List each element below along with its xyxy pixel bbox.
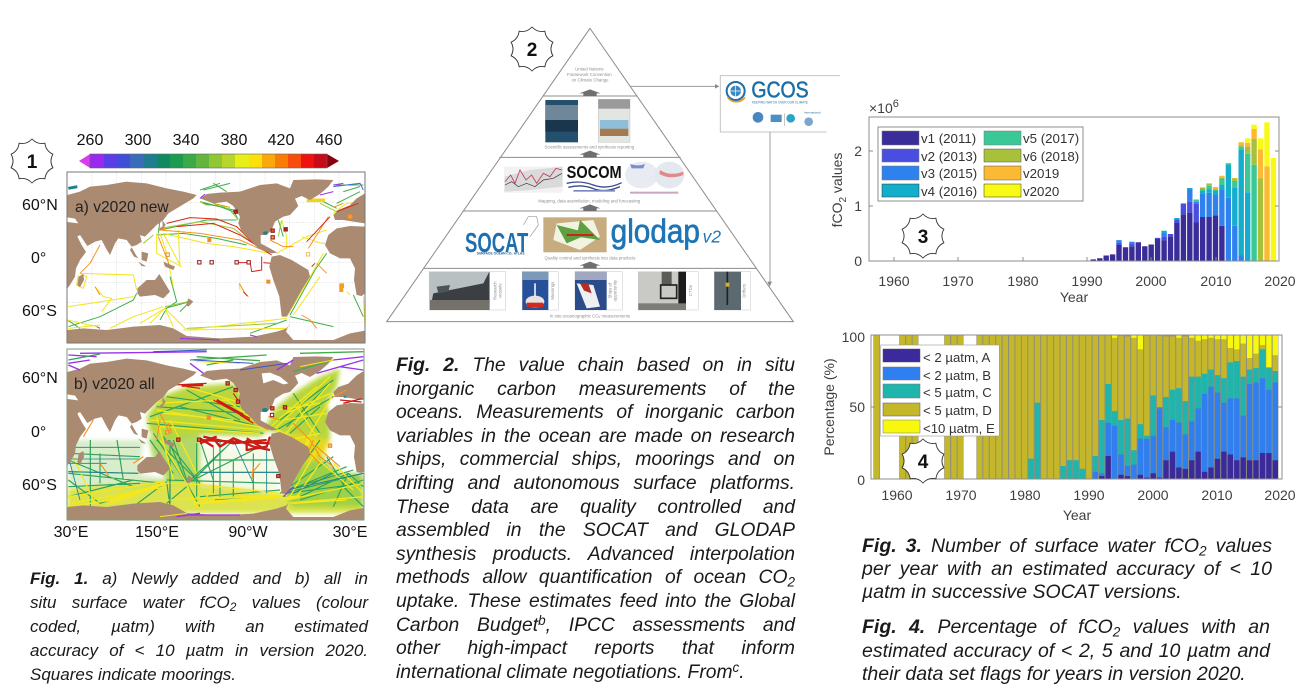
tier: in situ measurements: Ships of (608, 282, 613, 298)
axis labels: 2000 (1135, 273, 1167, 289)
moorings b (166, 382, 347, 478)
panel: value chain pyramid (387, 28, 840, 322)
tier: data products: SOCAT (465, 227, 528, 258)
axis labels: 2000 (1137, 487, 1169, 503)
GCOS box (720, 76, 840, 132)
tier: data products: SURFACE OCEAN CO₂ ATLAS (477, 251, 525, 255)
colour scale: 340 (173, 132, 199, 149)
axis labels: 1970 (945, 487, 977, 503)
caption: Fig. 2: ships, commercial ships, moorings and on (396, 449, 795, 470)
bars by SOCAT version (1093, 122, 1273, 261)
legend: < 2 µatm, A (923, 350, 991, 365)
map b: v2020 all (67, 349, 365, 520)
axis labels: 2020 (1264, 487, 1296, 503)
caption: Fig. 4: Fig. 4. Percentage of fCO2 values with an (862, 616, 1270, 639)
GCOS box: International (804, 110, 821, 114)
legend: <10 µatm, E (923, 421, 995, 436)
axis labels: 1990 (1071, 273, 1103, 289)
chart: fCO2 values per year (829, 98, 1296, 305)
colour scale: 420 (268, 132, 294, 149)
caption: Fig. 2 (396, 355, 796, 683)
caption: Fig. 3: µatm in successive SOCAT versions. (862, 581, 1182, 603)
tier: in situ measurements: vessels (497, 283, 502, 298)
caption: Fig. 1: accuracy of < 10 µatm in version 2020. (30, 641, 368, 660)
axis labels: 1960 (881, 487, 913, 503)
caption: Fig. 2: inorganic carbon measurements of the (396, 379, 795, 400)
tier: in situ measurements: CTDs (688, 285, 693, 296)
axis labels: Percentage (%) (821, 358, 837, 456)
legend: v1 (2011) (921, 131, 976, 146)
caption: Fig. 1: situ surface water fCO2 values (colour (30, 593, 368, 614)
tier: UNFCCC (567, 66, 612, 83)
legend: v2019 (1023, 166, 1059, 181)
colour scale: 260 (77, 132, 103, 149)
axis labels (829, 98, 1296, 305)
legend: v2 (2013) (921, 149, 977, 164)
map b label: b) v2020 all (74, 376, 155, 393)
caption: Fig. 4: estimated accuracy of < 2, 5 and 10 µatm and (862, 640, 1270, 662)
pyramid outline (387, 28, 793, 322)
caption: Fig. 2: These data are quality controlled and (396, 497, 795, 518)
axis labels: 6 (893, 98, 899, 110)
tier: assessments: Scientific assessments and synthesis reporting (544, 145, 635, 150)
axis labels: 50 (849, 399, 865, 415)
axis labels: 1 (854, 198, 862, 214)
axis labels: 2 (838, 197, 849, 203)
tier: assessments (544, 99, 635, 150)
map longitude labels: 30°E (54, 524, 88, 541)
colour scale (77, 132, 342, 168)
axis labels: ×10 (869, 100, 893, 116)
tier: UNFCCC: United Nations (575, 66, 604, 71)
arrow: GCOS to observations (767, 132, 772, 287)
axis labels: fCO (829, 203, 845, 227)
caption: Fig. 4 (862, 616, 1270, 685)
caption: Fig. 3: per year with an estimated accuracy of < 10 (862, 558, 1272, 580)
map longitude labels: 150°E (135, 524, 179, 541)
caption: Fig. 2: variables in the ocean are made on research (396, 426, 795, 447)
caption: Fig. 3 (862, 535, 1272, 603)
colour scale: 460 (316, 132, 342, 149)
map b latitude labels: 60°N (22, 370, 58, 387)
axis labels (821, 329, 1296, 523)
axis labels: Year (1060, 289, 1088, 305)
map longitude labels (54, 524, 367, 541)
tier: mapping and forecasting: Mapping, data assimilation, modeling and forecasting (538, 198, 641, 203)
axis labels: 1980 (1009, 487, 1041, 503)
GCOS box: KEEPING WATCH OVER OUR CLIMATE (752, 101, 809, 105)
arrow: UNFCCC to GCOS (630, 84, 719, 89)
caption: Fig. 2: drifting and autonomous surface platforms. (396, 473, 795, 494)
tier: in situ measurements: opportunity (613, 279, 618, 301)
map a latitude labels (22, 197, 58, 320)
map longitude labels: 90°W (228, 524, 269, 541)
caption: Fig. 2: international climate negotiations. Fromc. (396, 660, 745, 683)
caption: Fig. 2: synthesis products. Advanced interpolation (396, 544, 795, 565)
bar gaps (873, 335, 1278, 479)
legend: v2020 (1023, 184, 1059, 199)
axis labels: 1990 (1073, 487, 1105, 503)
tier: data products: v2 (703, 227, 721, 247)
tier: data products: glodap (611, 214, 700, 251)
badge 3 (902, 214, 944, 258)
tier: data products (465, 214, 721, 261)
axis labels: 100 (842, 329, 865, 345)
map b latitude labels: 60°S (22, 477, 57, 494)
map b latitude labels: 0° (31, 424, 46, 441)
badge 2 (511, 27, 553, 71)
moorings a (166, 210, 352, 292)
tier: in situ measurements: Moorings (550, 282, 555, 300)
colour scale: 300 (125, 132, 151, 149)
map a latitude labels: 60°N (22, 197, 58, 214)
stacked bars (877, 335, 1275, 479)
axis labels: 1980 (1007, 273, 1039, 289)
badge 4 (902, 439, 944, 483)
caption: Fig. 1: coded, µatm) with an estimated (30, 617, 368, 636)
tier: in situ measurements: Research (492, 281, 497, 300)
caption: Fig. 2: uptake. These estimates feed into the Global (396, 591, 795, 612)
axis labels: 2020 (1264, 273, 1296, 289)
caption: Fig. 1 (30, 569, 369, 684)
legend: < 2 µatm, B (923, 368, 991, 383)
axis labels: 1970 (942, 273, 974, 289)
badge 1: 1 (27, 152, 38, 173)
map b latitude labels (22, 370, 58, 494)
tier: in situ measurements: Drifters (742, 284, 747, 298)
map a label: a) v2020 new (75, 199, 169, 216)
chart: percentage by accuracy flag (821, 329, 1296, 523)
axis labels: Year (1063, 507, 1091, 523)
legend: v5 (2017) (1023, 131, 1079, 146)
axes (871, 335, 1282, 479)
caption: Fig. 2: Carbon Budgetb, IPCC assessments and (396, 612, 795, 636)
caption: Fig. 2: assembled in the SOCAT and GLODAP (396, 520, 795, 541)
legend: v4 (2016) (921, 184, 977, 199)
legend: v6 (2018) (1023, 149, 1079, 164)
axis labels: values (829, 153, 845, 197)
axis labels: 0 (857, 472, 865, 488)
badge 4: 4 (918, 452, 929, 473)
tier: mapping and forecasting (504, 162, 684, 203)
map a latitude labels: 60°S (22, 303, 57, 320)
hudson bay gap (262, 373, 288, 384)
axis labels: 0 (854, 253, 862, 269)
caption: Fig. 1: Squares indicate moorings. (30, 665, 236, 684)
caption: Fig. 2: other high-impact reports that inform (396, 638, 795, 659)
map a: v2020 new (67, 172, 365, 343)
caption: Fig. 1: Fig. 1. a) Newly added and b) all in (30, 569, 368, 588)
tier: in situ measurements (429, 272, 751, 319)
tier: UNFCCC: on Climate Change (571, 78, 609, 83)
tier: UNFCCC: Framework Convention (567, 72, 612, 77)
badge 3: 3 (918, 227, 928, 248)
tier: mapping and forecasting: SOCOM (567, 162, 622, 182)
tier: data products: Quality control and synthesis into data products (545, 256, 635, 261)
legend: < 5 µatm, D (923, 403, 992, 418)
legend: < 5 µatm, C (923, 385, 992, 400)
map a latitude labels: 0° (31, 250, 46, 267)
legend: v3 (2015) (921, 166, 977, 181)
map longitude labels: 30°E (333, 524, 367, 541)
legend (881, 345, 999, 436)
legend (878, 127, 1083, 201)
tier: in situ measurements: In situ oceanographic CO₂ measurements (550, 314, 630, 319)
axis labels: 1960 (878, 273, 910, 289)
axis labels: 2 (854, 143, 862, 159)
axis labels: 2010 (1200, 273, 1232, 289)
caption: Fig. 2: methods allow quantification of ocean CO2 (396, 567, 795, 590)
GCOS box: GCOS (751, 77, 809, 103)
axes (869, 117, 1279, 261)
badge 1 (11, 139, 53, 183)
caption: Fig. 4: their data set flags for years in version 2020. (862, 663, 1246, 685)
caption: Fig. 3: Fig. 3. Number of surface water fCO2 values (862, 535, 1272, 558)
tier arrows (579, 89, 601, 268)
caption: Fig. 2: Fig. 2. The value chain based on in situ (396, 355, 795, 376)
badge 2: 2 (527, 40, 537, 61)
caption: Fig. 2: oceans. Measurements of inorganic carbon (396, 402, 795, 423)
axis labels: 2010 (1201, 487, 1233, 503)
colour scale: 380 (221, 132, 247, 149)
